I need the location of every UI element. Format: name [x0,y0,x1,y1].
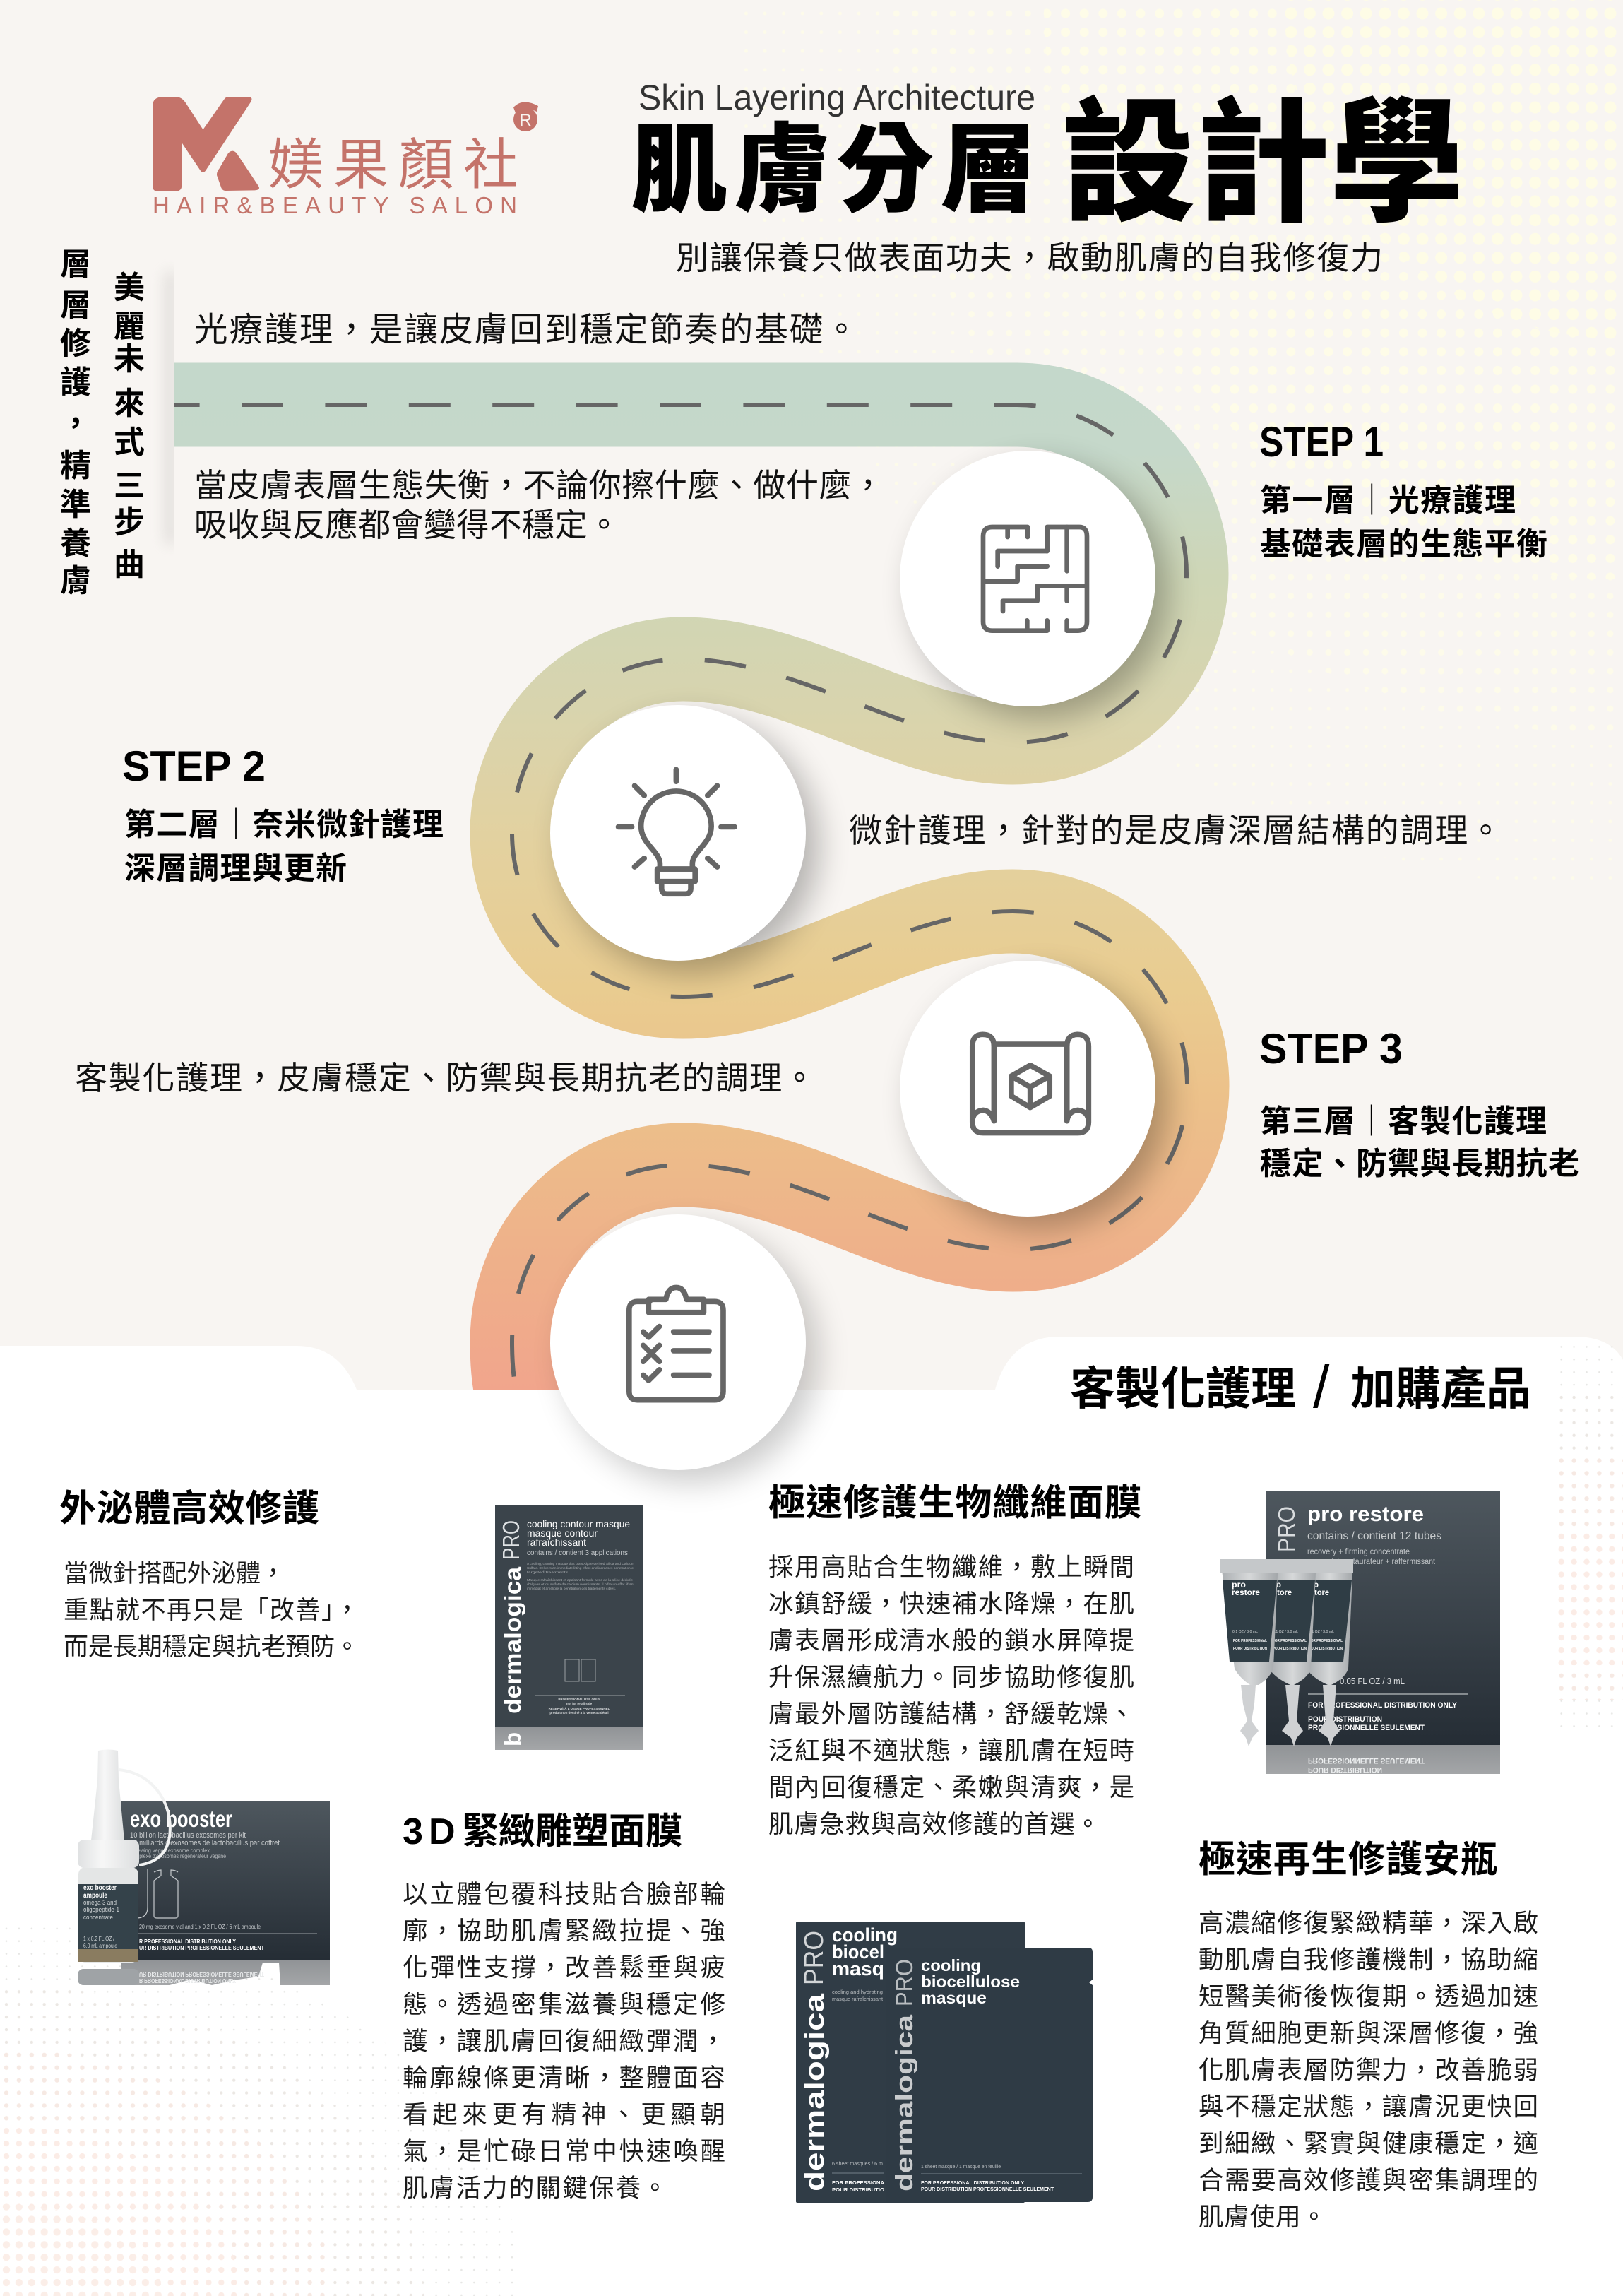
product text: 極速修護生物纖維面膜: 膚最外層防護結構，舒緩乾燥、 [768,1700,1134,1728]
logo: 媄果顏社 [153,97,538,218]
product text: 3D緊緻雕塑面膜: 3D緊緻雕塑面膜 [403,1811,682,1852]
product: cooling contour masque box: contains / contient 3 applications [527,1549,628,1557]
product: exo booster box and ampoule: 10 milliards d'exosomes de lactobacillus par coffret [130,1839,280,1847]
section heading: 客製化護理 / 加購產品: 客製化護理 [1070,1363,1296,1414]
step 1 intro text: 光療護理，是讓皮膚回到穩定節奏的基礎。 [194,312,858,349]
tube 2: FOR PROFESSIONAL [1273,1639,1307,1643]
product: cooling biocellulose masque packs: FOR PROFESSIONAL DISTRIBUTION ONLY [921,2181,1024,2186]
ampoule bottle [78,1749,170,1985]
product: exo booster box and ampoule: R PROFESSIONAL DISTRIBUTION ONLY [139,1977,236,1984]
product: exo booster box and ampoule: UR DISTRIBUTION PROFESSIONELLE SEULEMENT [139,1944,265,1951]
white lower panel [0,1337,1623,2296]
logo: 媄果顏社: HAIR&BEAUTY SALON [153,192,517,218]
step 1 label: 第一層｜光療護理 [1260,483,1516,518]
product: exo booster box and ampoule: exo booster [130,1806,232,1832]
product: cooling contour masque box: dermalogica [499,1566,525,1714]
product: pro restore box and tubes: PRO [1273,1506,1300,1552]
product: cooling biocellulose masque packs: 1 sheet masque / 1 masque en feuille [921,2165,1001,2170]
tube 2 [1269,1559,1316,1746]
halftone dots: lower left [0,1922,523,2296]
product: cooling contour masque box: masque contour [527,1528,598,1539]
ampoule bottle: omega-3 and [83,1899,117,1907]
product text: 極速修護生物纖維面膜: 極速修護生物纖維面膜 [768,1483,1141,1524]
product: cooling biocellulose masque packs: cooling [832,1924,898,1946]
product: cooling biocellulose masque packs: dermalogica [891,2014,918,2191]
product text: 3D緊緻雕塑面膜: 肌膚活力的關鍵保養。 [403,2174,667,2202]
product text: 極速再生修護安瓶: 短醫美術後恢復期。透過加速 [1199,1982,1538,2011]
product: pro restore box and tubes: PROFESSIONNELLE SEULEMENT [1308,1756,1425,1765]
product: pro restore box and tubes [1220,1491,1500,1774]
step 3 label [1259,1025,1579,1181]
icon: light bulb [619,769,735,894]
product text: 外泌體高效修護: 外泌體高效修護 [59,1489,319,1529]
product: exo booster box and ampoule: 20 mg exosome vial and 1 x 0.2 FL OZ / 6 mL ampoule [139,1923,261,1930]
tube 3 [1307,1559,1353,1746]
product: cooling contour masque box: PROFESSIONAL USE ONLY [558,1698,600,1701]
product text: 3D緊緻雕塑面膜: 氣，是忙碌日常中快速喚醒 [403,2137,725,2165]
tube 2: 0.1 OZ / 3.0 mL [1273,1630,1298,1634]
product text: 極速再生修護安瓶: 化肌膚表層防禦力，改善脆弱 [1199,2056,1538,2084]
product: cooling biocellulose masque packs: cooling and hydrating [832,1990,883,1995]
product: cooling biocellulose masque packs: cooling [921,1956,981,1975]
icon: blueprint scroll [973,1034,1088,1133]
product text: 3D緊緻雕塑面膜: 輪廓線條更清晰，整體面容 [403,2064,725,2092]
circle: blueprint scroll icon [900,961,1168,1229]
tube 1: pro [1232,1581,1246,1590]
product: cooling biocellulose masque packs: biocellulose [921,1972,1020,1991]
side shadow by the road start [165,272,177,544]
product: cooling contour masque box: RÉSERVÉ À L'USAGE PROFESSIONNEL [549,1705,610,1710]
tube 2: store [1273,1589,1292,1597]
product: cooling biocellulose masque packs: POUR DISTRIBUTION PROFESSIONNELLE SEULEMENT [921,2187,1054,2192]
product text: 極速再生修護安瓶: 高濃縮修復緊緻精華，深入啟 [1199,1909,1538,1937]
product: pro restore box and tubes: recovery + firming concentrate [1307,1548,1410,1556]
tube 3: o [1314,1581,1319,1590]
step 1 description: 吸收與反應都會變得不穩定。 [194,507,620,543]
ampoule bottle: exo booster [83,1884,117,1892]
product: cooling biocellulose masque packs: biocel [832,1941,884,1963]
circle: light bulb icon [550,705,819,974]
product: exo booster box and ampoule: UR DISTRIBUTION PROFESSIONELLE SEULEMENT [139,1971,265,1978]
product: cooling biocellulose masque packs: 6 sheet masques / 6 m [832,2162,883,2167]
product: exo booster box and ampoule: complexe d'exosomes régénérateur végane [130,1853,226,1859]
product: cooling biocellulose masque packs: masque rafraîchissant [832,1997,883,2002]
circle: checklist icon [550,1214,819,1483]
step 3 label: 第三層｜客製化護理 [1260,1104,1547,1139]
vertical slogan: 層層修護,精準養膚: 層層修護，精準養膚 [60,247,91,598]
section heading: 客製化護理 / 加購產品: 加購產品 [1350,1363,1531,1414]
step 2 label: 第二層｜奈米微針護理 [124,807,444,842]
product: exo booster box and ampoule [78,1749,330,1985]
tube 1: POUR DISTRIBUTION [1233,1647,1267,1651]
product: cooling contour masque box: b [499,1732,525,1746]
circle: maze icon [900,451,1168,719]
step 2 label: 深層調理與更新 [124,851,347,886]
section heading: 客製化護理 / 加購產品: / [1313,1354,1330,1420]
product: cooling contour masque box: not for retail sale [566,1702,593,1705]
product text: 外泌體高效修護: 當微針搭配外泌體， [64,1560,285,1587]
product text: 極速修護生物纖維面膜: 採用高貼合生物纖維，敷上瞬間 [768,1553,1134,1581]
product text: 極速再生修護安瓶: 與不穩定狀態，讓膚況更快回 [1199,2093,1538,2121]
tube 3: FOR PROFESSIONAL [1309,1639,1343,1643]
logo: 媄果顏社: 媄果顏社 [268,134,518,196]
product: pro restore box and tubes: FOR PROFESSIONAL DISTRIBUTION ONLY [1308,1701,1458,1710]
product: cooling biocellulose masque packs: POUR DISTRIBUTIO [832,2188,885,2193]
product text: 極速修護生物纖維面膜: 冰鎮舒緩，快速補水降燥，在肌 [768,1590,1134,1618]
product: cooling contour masque box [495,1505,643,1750]
product text: 外泌體高效修護 [59,1489,359,1661]
product: cooling contour masque box: produit non destiné à la vente au détail [549,1711,609,1715]
product: cooling contour masque box: PRO [498,1520,524,1560]
title block: 別讓保養只做表面功夫，啟動肌膚的自我修復力 [676,239,1383,276]
product: pro restore box and tubes: POUR DISTRIBUTION [1308,1715,1382,1724]
product: cooling biocellulose masque packs: dermalogica [800,1993,830,2191]
step 2 description: 微針護理，針對的是皮膚深層結構的調理。 [849,812,1502,849]
product: pro restore box and tubes: concentré restaurateur + raffermissant [1307,1558,1436,1566]
tube 3: POUR DISTRIBUTION [1309,1647,1343,1651]
tube 3: store [1310,1589,1329,1597]
product text: 極速再生修護安瓶: 角質細胞更新與深層修復，強 [1199,2019,1538,2047]
logo: 媄果顏社: R [519,111,532,130]
product: cooling contour masque box: d'algues et du sulfate de calcium nourrissants. Il offre un effet liftant [527,1582,635,1586]
product: exo booster box and ampoule: 10 billion lactobacillus exosomes per kit [130,1831,246,1840]
tube 1 [1220,1559,1278,1746]
product text: 極速修護生物纖維面膜: 升保濕續航力。同步協助修復肌 [768,1663,1134,1691]
step 3 description: 客製化護理，皮膚穩定、防禦與長期抗老的調理。 [75,1060,816,1096]
title block [631,78,1464,276]
product text: 極速再生修護安瓶: 到細緻、緊實與健康穩定，適 [1199,2129,1538,2158]
title block: 設計學 [1062,89,1464,239]
ampoule bottle: ampoule [83,1892,107,1900]
step 3 label: STEP 3 [1259,1025,1403,1072]
tube 2: o [1276,1581,1281,1590]
product: pro restore box and tubes: POUR DISTRIBUTION [1308,1765,1382,1774]
road: winding path [174,405,1187,1413]
step 1 label: STEP 1 [1259,418,1384,466]
product text: 極速修護生物纖維面膜: 肌膚急救與高效修護的首選。 [768,1810,1100,1838]
product: cooling biocellulose masque packs [796,1922,1093,2203]
product: pro restore box and tubes: pro restore [1307,1503,1424,1526]
product text: 3D緊緻雕塑面膜: 以立體包覆科技貼合臉部輪 [403,1880,725,1908]
ampoule bottle: concentrate [83,1914,113,1922]
step 1 description [194,467,884,543]
product: pro restore box and tubes: 0.05 FL OZ / 3 mL [1340,1676,1405,1686]
product: cooling biocellulose masque packs: PRO [799,1931,829,1985]
product: cooling contour masque box: immédiat et améliore la pénétration des traitements ciblés. [527,1587,616,1590]
product: pro restore box and tubes: contains / contient 12 tubes [1307,1530,1441,1542]
step 1 label: 基礎表層的生態平衡 [1260,527,1547,562]
step 3 label: 穩定、防禦與長期抗老 [1260,1147,1579,1181]
title block: 肌膚分層 [631,117,1037,225]
product text: 3D緊緻雕塑面膜: 廓，協助肌膚緊緻拉提、強 [403,1917,725,1945]
product text: 3D緊緻雕塑面膜 [403,1811,725,2202]
product text: 3D緊緻雕塑面膜: 化彈性支撐，改善鬆垂與疲 [403,1953,725,1982]
icon: maze [983,527,1087,631]
product text: 3D緊緻雕塑面膜: 看起來更有精神、更顯朝 [403,2100,725,2129]
product: cooling biocellulose masque packs: FOR PROFESSIONA [832,2181,884,2186]
step 2 label [122,742,444,886]
ampoule bottle: oligopeptide-1 [83,1906,119,1914]
halftone dots: right edge of panel [1554,1340,1623,1736]
vertical slogan: 美麗未來式三步曲: 美麗未來式三步曲 [114,271,145,582]
tube 1: restore [1232,1589,1260,1597]
product text: 極速再生修護安瓶: 動肌膚自我修護機制，協助縮 [1199,1946,1538,1974]
ampoule bottle: 6.0 mL ampoule [83,1942,117,1949]
halftone dots: top right [733,0,1623,890]
product text: 極速再生修護安瓶: 極速再生修護安瓶 [1199,1840,1497,1881]
product: cooling contour masque box: targeted treatments. [527,1570,569,1574]
product: cooling contour masque box: rafraîchissant [527,1537,586,1548]
product: cooling contour masque box: cooling contour masque [527,1519,630,1529]
step 1 label [1259,418,1547,562]
tube 2: POUR DISTRIBUTION [1273,1647,1307,1651]
product: cooling biocellulose masque packs: PRO [891,1959,918,2006]
title block: Skin Layering Architecture [638,78,1035,117]
tube 3: 0.1 OZ / 3.0 mL [1309,1630,1334,1634]
product: exo booster box and ampoule: renewing vegan exosome complex [130,1847,210,1854]
ampoule bottle: 1 x 0.2 FL OZ / [83,1935,114,1942]
product: exo booster box and ampoule: R PROFESSIONAL DISTRIBUTION ONLY [139,1938,236,1945]
product text: 極速再生修護安瓶: 肌膚使用。 [1199,2203,1326,2231]
step 2 label: STEP 2 [122,742,266,790]
product text: 極速再生修護安瓶 [1199,1840,1538,2231]
product: cooling contour masque box: A cooling, calming masque that uses Algae-derived Silica and Calcium [527,1562,634,1566]
product: cooling contour masque box: Sulfate. Delivers an immediate lifting effect and increases penetration of [527,1566,635,1570]
product: cooling biocellulose masque packs: masque [921,1989,987,2007]
product text: 極速修護生物纖維面膜 [768,1483,1141,1838]
product text: 外泌體高效修護: 重點就不再只是「改善」， [64,1597,359,1624]
product text: 極速修護生物纖維面膜: 間內回復穩定、柔嫩與清爽，是 [768,1773,1134,1801]
product text: 3D緊緻雕塑面膜: 護，讓肌膚回復細緻彈潤， [403,2027,725,2055]
product text: 外泌體高效修護: 而是長期穩定與抗老預防。 [64,1633,359,1661]
product text: 3D緊緻雕塑面膜: 態。透過密集滋養與穩定修 [403,1990,725,2018]
icon: clipboard checklist [629,1287,723,1400]
product: cooling contour masque box: Masque rafraîchissant et apaisant formulé avec de la silice dérivée [527,1578,634,1582]
product text: 極速修護生物纖維面膜: 膚表層形成清水般的鎖水屏障提 [768,1626,1134,1655]
product: cooling biocellulose masque packs: masq [832,1958,884,1980]
tube 1: FOR PROFESSIONAL [1233,1639,1267,1643]
product text: 極速再生修護安瓶: 合需要高效修護與密集調理的 [1199,2166,1538,2194]
product text: 極速修護生物纖維面膜: 泛紅與不適狀態，讓肌膚在短時 [768,1736,1134,1765]
product: pro restore box and tubes: PROFESSIONNELLE SEULEMENT [1308,1724,1425,1732]
step 1 description: 當皮膚表層生態失衡，不論你擦什麼、做什麼， [194,467,884,504]
tube 1: 0.1 OZ / 3.0 mL [1232,1630,1258,1634]
